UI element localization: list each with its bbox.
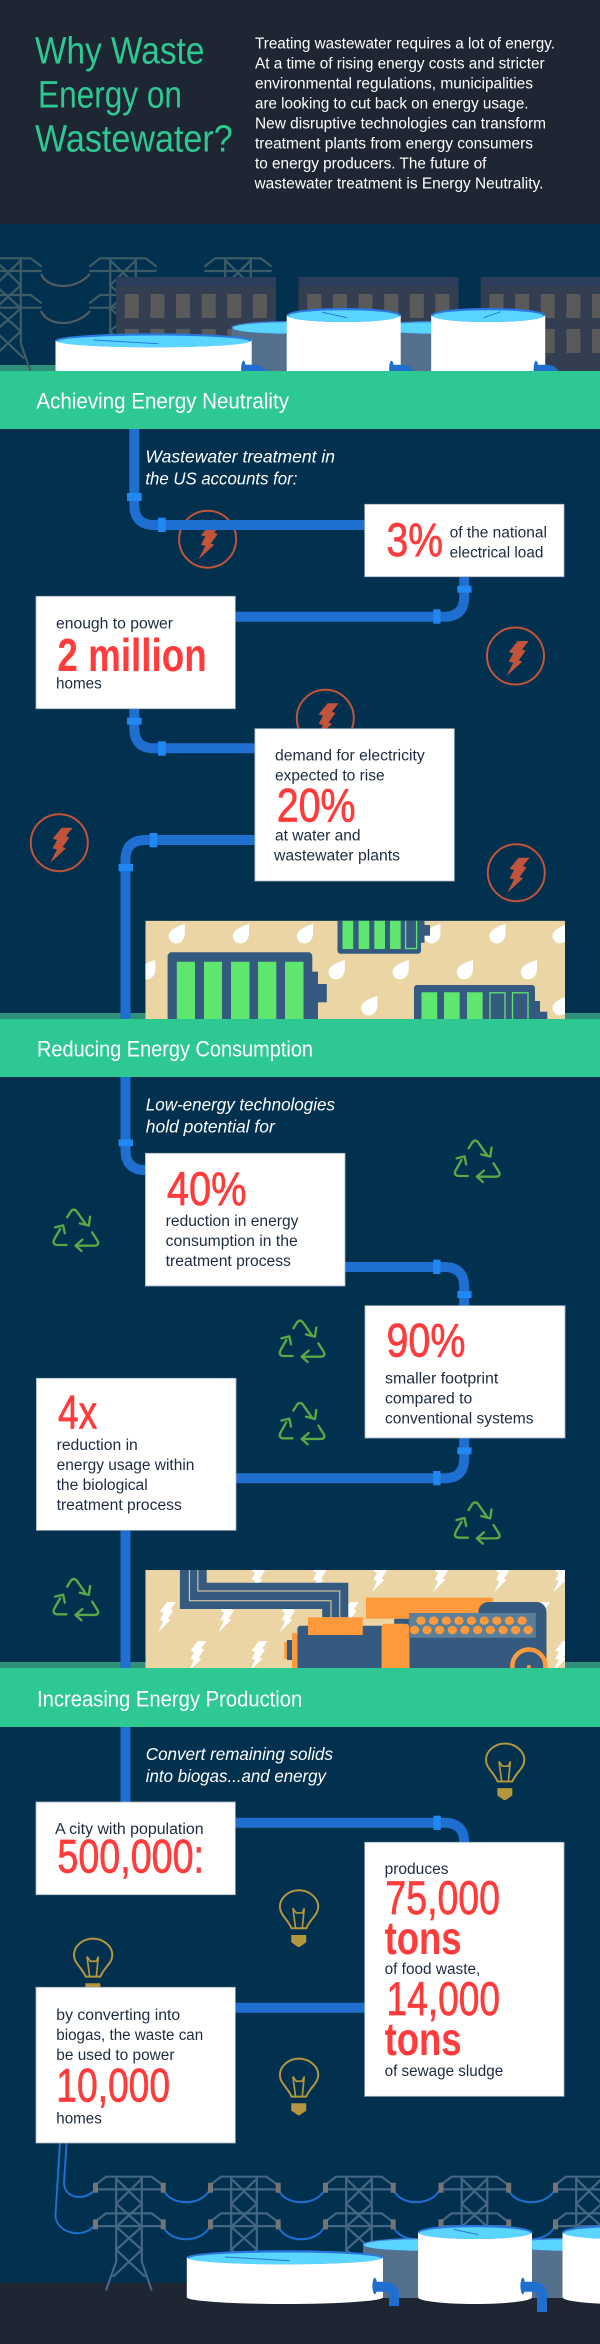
stat card: waste tons: 75,000 <box>385 1871 500 1924</box>
stat card: 3 percent: 3% <box>386 513 443 566</box>
stat card: 40 percent: 40% <box>167 1162 246 1215</box>
right battery <box>414 985 548 1019</box>
engine illustration panel <box>0 1570 600 1668</box>
stat card: 4x: reduction in <box>57 1437 138 1454</box>
stat card: 3 percent: of the national <box>450 524 547 541</box>
stat card: 90 percent: 90% <box>386 1314 465 1367</box>
stat card: waste tons: produces <box>385 1861 449 1878</box>
stat card: 40 percent <box>145 1153 345 1286</box>
title <box>35 30 233 161</box>
water drops <box>139 924 569 1015</box>
pipes for section three <box>126 1727 464 2008</box>
light bulb icons <box>74 1744 524 2115</box>
intro paragraph: At a time of rising energy costs and stricter <box>255 56 545 73</box>
pipes for section one <box>119 429 471 1019</box>
top illustration: pylons, buildings and tanks <box>0 258 600 395</box>
stat card: 40 percent: treatment process <box>166 1253 291 1270</box>
italic intro: wastewater treatment: the US accounts for: <box>145 469 298 489</box>
stat card: waste tons: tons <box>385 1912 462 1964</box>
stat card: 40 percent: reduction in energy <box>166 1213 299 1230</box>
battery illustration panel <box>0 920 600 1019</box>
stat card: 40 percent: consumption in the <box>166 1233 298 1250</box>
intro paragraph: New disruptive technologies can transform <box>255 116 546 133</box>
stat card: 90 percent: conventional systems <box>385 1410 534 1427</box>
top battery <box>338 920 430 954</box>
stat card: biogas homes: by converting into <box>56 2007 180 2024</box>
large battery <box>168 952 327 1019</box>
stat card: city population: A city with population <box>55 1821 204 1838</box>
italic intro: convert remaining solids: Convert remaining solids <box>146 1744 333 1764</box>
bottom water tanks <box>187 2225 600 2312</box>
stat card: biogas homes <box>36 1987 235 2143</box>
stat card: city population: 500,000: <box>57 1830 204 1883</box>
power lines <box>55 2143 554 2239</box>
italic intro: wastewater treatment: Wastewater treatment in <box>145 447 335 467</box>
stat card: waste tons: tons <box>385 2013 462 2065</box>
stat card: waste tons: 14,000 <box>386 1972 500 2025</box>
stat card: 2 million <box>36 596 235 709</box>
stat card: waste tons <box>365 1842 564 2096</box>
stat card: 2 million: homes <box>56 675 102 692</box>
intro paragraph: are looking to cut back on energy usage. <box>255 96 528 113</box>
stat card: 4x: 4x <box>58 1385 97 1438</box>
title: Wastewater? <box>35 119 233 161</box>
insulators <box>93 2183 558 2229</box>
section band: reducing energy consumption: Reducing Energy Consumption <box>37 1037 313 1062</box>
section band: increasing energy production: Increasing Energy Production <box>37 1687 302 1712</box>
stat card: biogas homes: homes <box>56 2110 102 2127</box>
title: Energy on <box>38 75 182 117</box>
intro paragraph <box>254 36 555 193</box>
section band: achieving energy neutrality: Achieving Energy Neutrality <box>36 389 289 414</box>
stat card: 3 percent: electrical load <box>450 544 543 561</box>
white bolts <box>158 1570 565 1668</box>
italic intro: convert remaining solids: into biogas...and energy <box>146 1766 327 1786</box>
title: Why Waste <box>35 30 204 72</box>
intro paragraph: environmental regulations, municipalities <box>255 76 533 93</box>
italic intro: low-energy technologies: Low-energy technologies <box>146 1095 335 1115</box>
stat card: 2 million: enough to power <box>56 615 173 632</box>
transmission towers <box>95 2177 600 2290</box>
buildings <box>116 277 600 371</box>
bottom ground and pylons <box>0 2143 600 2344</box>
stat card: 20 percent: expected to rise <box>275 768 385 785</box>
section band: achieving energy neutrality <box>0 371 600 429</box>
section band: increasing energy production <box>0 1668 600 1727</box>
stat card: 4x: the biological <box>57 1477 148 1494</box>
stat card: biogas homes: be used to power <box>56 2047 174 2064</box>
italic intro: low-energy technologies: hold potential for <box>146 1117 276 1137</box>
intro paragraph: treatment plants from energy consumers <box>255 136 533 153</box>
italic intro: wastewater treatment <box>145 447 335 489</box>
stat card: 20 percent <box>255 729 454 881</box>
lightning icons <box>31 511 545 901</box>
stat card: 4x: treatment process <box>57 1497 182 1514</box>
stat card: 90 percent <box>365 1306 565 1438</box>
water tanks <box>55 308 555 395</box>
stat card: biogas homes: biogas, the waste can <box>56 2027 203 2044</box>
engine <box>284 1598 548 1668</box>
pylons <box>0 258 272 372</box>
recycle icons <box>54 1141 500 1620</box>
stat card: 20 percent: 20% <box>277 779 356 832</box>
pipes for section two <box>119 1077 471 1668</box>
header panel <box>0 0 600 224</box>
stat card: waste tons: of food waste, <box>385 1961 480 1978</box>
stat card: 20 percent: demand for electricity <box>275 748 425 765</box>
stat card: waste tons: of sewage sludge <box>385 2063 503 2080</box>
conduit <box>180 1570 348 1617</box>
intro paragraph: wastewater treatment is Energy Neutrality. <box>254 176 543 193</box>
stat card: 3 percent <box>365 504 564 577</box>
italic intro: convert remaining solids <box>146 1744 333 1786</box>
section band: reducing energy consumption <box>0 1019 600 1077</box>
stat card: 90 percent: smaller footprint <box>385 1370 499 1387</box>
intro paragraph: to energy producers. The future of <box>255 156 487 173</box>
stat card: city population <box>36 1802 235 1895</box>
stat card: 20 percent: wastewater plants <box>273 848 400 865</box>
stat card: 2 million: 2 million <box>57 629 207 681</box>
stat card: 4x <box>36 1378 236 1530</box>
stat card: biogas homes: 10,000 <box>56 2059 170 2112</box>
stat card: 90 percent: compared to <box>385 1390 472 1407</box>
italic intro: low-energy technologies <box>146 1095 335 1137</box>
stat card: 20 percent: at water and <box>275 828 360 845</box>
intro paragraph: Treating wastewater requires a lot of energy. <box>255 36 555 53</box>
stat card: 4x: energy usage within <box>57 1457 194 1474</box>
